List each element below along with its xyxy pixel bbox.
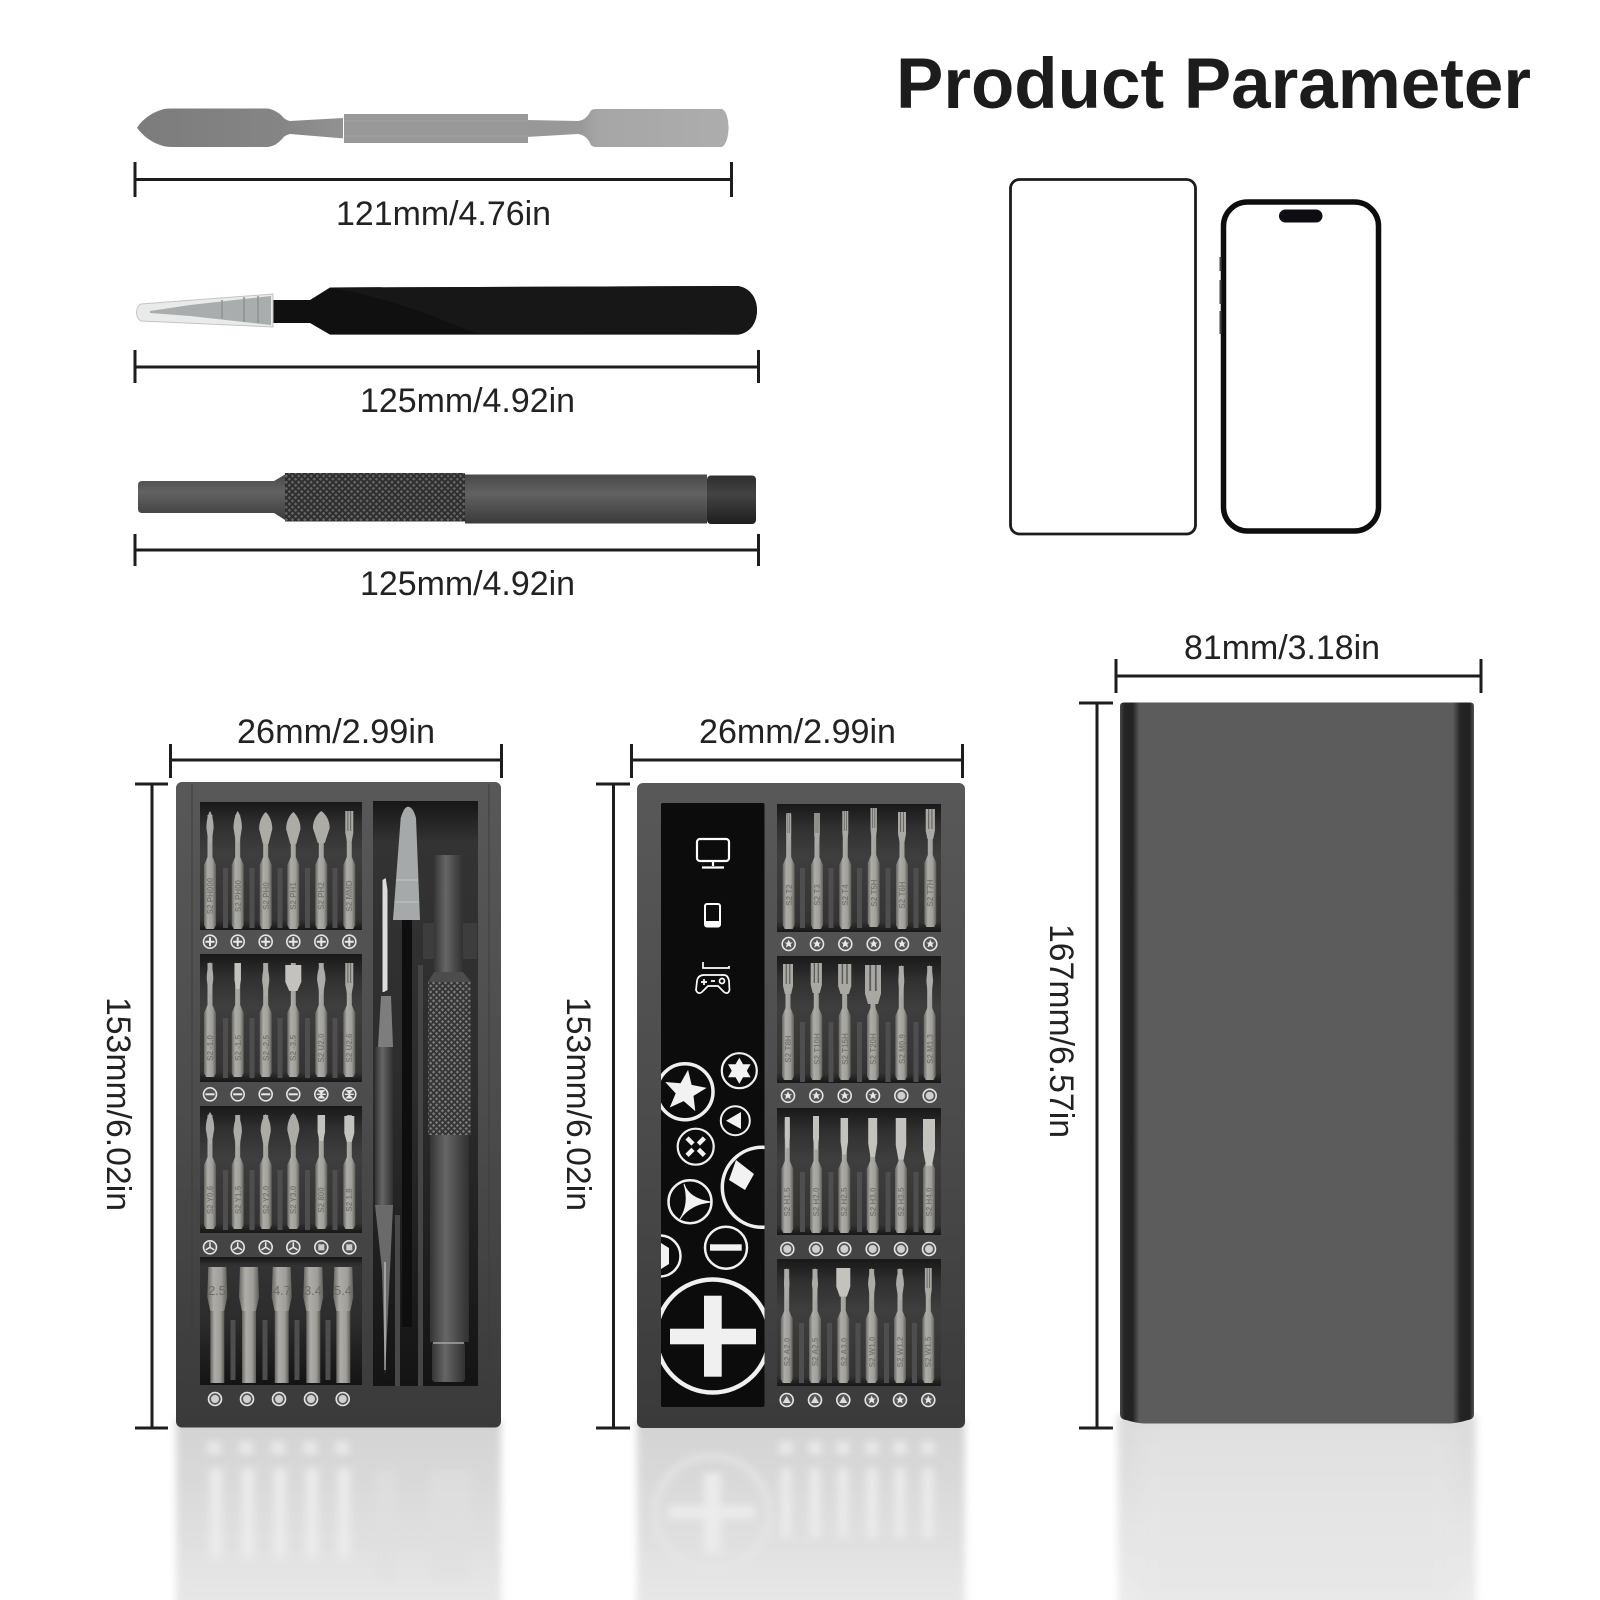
- reflection: tray 1: [176, 1420, 501, 1600]
- tray 1 well: row 1: [200, 802, 362, 930]
- tray 2 well: row 1: S2 T3: [813, 884, 822, 906]
- tray 2 well: row 1: S2 T6H: [898, 881, 907, 909]
- tray 1 well: row 1: S2 PH0: [262, 882, 271, 910]
- tray 1 well: row 2: S2 U2.6: [345, 1033, 354, 1062]
- black icon panel: [661, 803, 764, 1407]
- stored tool: tweezers: [393, 807, 420, 1327]
- tray 1 legend: row 2: [204, 1088, 356, 1101]
- dimension: spudger length: [135, 162, 732, 233]
- dimension: case height: 167mm/6.57in: [1042, 924, 1080, 1138]
- icon: monitor: [697, 839, 729, 868]
- tray 2 well: row 3: S2 H1.5: [783, 1187, 792, 1216]
- tray 2 well: row 3: S2 H3.0: [869, 1187, 878, 1216]
- tray 1 legend: row 1: [204, 935, 356, 948]
- dimension: screwdriver length: [135, 534, 758, 603]
- tool: screwdriver handle: [138, 473, 756, 524]
- tray 2 well: row 1: S2 T2: [785, 884, 794, 906]
- tray 1 well: row 2: S2 -1.0: [206, 1035, 215, 1061]
- stored tool: spudger: [375, 878, 393, 1376]
- icon: gamepad: [696, 962, 730, 993]
- tray 1 legend: row 4: [208, 1392, 349, 1406]
- symbol: five-point star: [657, 1064, 713, 1120]
- tray 2 well: row 2: S2 T10H: [813, 1033, 822, 1065]
- icon: smartphone outline: [1220, 202, 1378, 531]
- tray 2 legend: row 3: [781, 1242, 936, 1256]
- dimension: case height: [1042, 703, 1113, 1428]
- title: Product Parameter: [896, 45, 1531, 124]
- dimension: tray 1 height: 153mm/6.02in: [99, 997, 137, 1211]
- tray 1 well: row 1: S2 MMD: [345, 880, 354, 912]
- tool: tweezers with clear cap: [136, 286, 757, 335]
- symbol: large plus: [656, 1280, 769, 1392]
- dimension: case width: 81mm/3.18in: [1184, 629, 1380, 667]
- tray 1 well: row 1: S2 PH2: [317, 882, 326, 910]
- tray 2 legend: row 4: [780, 1394, 935, 1406]
- dimension: tray 2 width: [632, 713, 962, 778]
- tray 1 well: row 4 sockets: [200, 1257, 362, 1385]
- tray 1 well: row 2: S2 -2.5: [262, 1035, 271, 1061]
- symbol: minus: [705, 1227, 747, 1269]
- tray 1 well: row 3: [200, 1106, 362, 1233]
- product: closed aluminium case: [1120, 702, 1474, 1424]
- symbol: tri-wing: [668, 1180, 712, 1223]
- tray 2 well: row 4: S2 A2.0: [783, 1337, 792, 1366]
- symbol: four-dot cross: [678, 1129, 714, 1165]
- reflection: tray 2: [637, 1420, 965, 1600]
- dimension: spudger length: 121mm/4.76in: [336, 195, 551, 233]
- reflection: case: [1118, 1415, 1476, 1600]
- tray 1 well: row 3: S2 Y2.0: [262, 1185, 271, 1214]
- tray 2 well: row 2: S2 T15H: [841, 1033, 850, 1065]
- driver-type symbols: [661, 1052, 764, 1395]
- tray 2 well: row 4: [777, 1259, 941, 1386]
- tray 1 legend: row 3: [204, 1241, 356, 1254]
- panel: tray 2 with torx, hex and tri-point bits: [637, 783, 965, 1428]
- tool: double-ended spudger: [137, 108, 729, 147]
- tray 1 well: row 4 sockets: 2.5: [208, 1283, 226, 1298]
- tray 1 well: row 2: [200, 954, 362, 1082]
- dimension: tray 1 width: 26mm/2.99in: [237, 713, 435, 751]
- tray 1 well: row 2: S2 -1.5: [234, 1035, 243, 1061]
- dimension: tray 1 width: [170, 713, 502, 778]
- tray 2 well: row 1: S2 T5H: [870, 879, 879, 907]
- tray 2 well: row 2: [777, 956, 941, 1083]
- tray 2 well: row 2: S2 T20H: [869, 1033, 878, 1065]
- tray 2 well: row 3: [777, 1108, 941, 1235]
- tray 1 long compartment: [373, 801, 478, 1386]
- tray 1 well: row 3: S2 800: [317, 1187, 326, 1213]
- dimension: tweezers length: [135, 350, 758, 420]
- tray 2 well: row 3: S2 H3.5: [897, 1187, 906, 1216]
- tray 2 well: row 4: S2 W1.5: [924, 1336, 933, 1367]
- stored tool: screwdriver: [428, 855, 471, 1382]
- dimension: tweezers length: 125mm/4.92in: [360, 382, 575, 420]
- tray 2 well: row 1: S2 T4: [841, 884, 850, 906]
- symbol: partial hex: [661, 1234, 682, 1278]
- panel: tray 1 with philips, slotted, tri-wing and socket bits: [176, 782, 501, 1428]
- dimension: screwdriver length: 125mm/4.92in: [360, 565, 575, 603]
- tray 1 well: row 4 sockets: 5.4: [334, 1283, 352, 1298]
- symbol: triangle: [721, 1106, 750, 1135]
- tray 1 well: row 4 sockets: 3.4: [304, 1283, 322, 1298]
- tray 1 well: row 2: S2 U2.0: [317, 1033, 326, 1062]
- dimension: tray 2 height: 153mm/6.02in: [559, 997, 597, 1211]
- tray 2 legend: row 1: [782, 938, 937, 950]
- symbol: large slot: [720, 1146, 764, 1229]
- tray 1 well: row 1: S2 PH00: [234, 879, 243, 912]
- tray 2 well: row 3: S2 H4.0: [925, 1187, 934, 1216]
- dimension: case width: [1116, 629, 1481, 693]
- tray 1 well: row 3: S2 1.8: [345, 1188, 354, 1212]
- dimension: tray 1 height: [99, 784, 168, 1428]
- tray 2 well: row 2: S2 M0.9: [898, 1034, 907, 1064]
- icon: screen protector outline: [1010, 180, 1196, 534]
- tray 1 well: row 3: S2 Y0.6: [206, 1185, 215, 1214]
- symbol: six-lobe star: [722, 1053, 757, 1088]
- tray 2 well: row 1: [777, 804, 941, 932]
- stored tool: clip: [423, 923, 477, 959]
- tray 2 well: row 4: S2 W1.0: [868, 1336, 877, 1367]
- tray 2 well: row 4: S2 A3.0: [840, 1337, 849, 1366]
- tray 2 well: row 3: S2 H2.5: [840, 1187, 849, 1216]
- tray 1 well: row 2: S2 -3.5: [289, 1035, 298, 1061]
- icon: tablet: [705, 904, 720, 926]
- tray 2 well: row 4: S2 A2.5: [811, 1337, 820, 1366]
- tray 2 well: row 2: S2 T8H: [784, 1035, 793, 1063]
- tray 1 well: row 3: S2 Y3.0: [289, 1185, 298, 1214]
- tray 1 well: row 4 sockets: 4.7: [273, 1283, 291, 1298]
- tray 1 well: row 1: S2 PH000: [206, 877, 215, 914]
- dimension: tray 2 width: 26mm/2.99in: [699, 713, 896, 751]
- tray 1 well: row 1: S2 PH1: [289, 882, 298, 910]
- dimension: tray 2 height: [559, 784, 630, 1428]
- tray 2 legend: row 2: [782, 1089, 936, 1102]
- tray 2 well: row 1: S2 T7H: [926, 879, 935, 907]
- tray 2 well: row 4: S2 W1.2: [896, 1336, 905, 1367]
- tray 2 well: row 2: S2 M1.3: [926, 1034, 935, 1064]
- tray 2 well: row 3: S2 H2.0: [812, 1187, 821, 1216]
- tray 1 well: row 3: S2 Y1.5: [234, 1185, 243, 1214]
